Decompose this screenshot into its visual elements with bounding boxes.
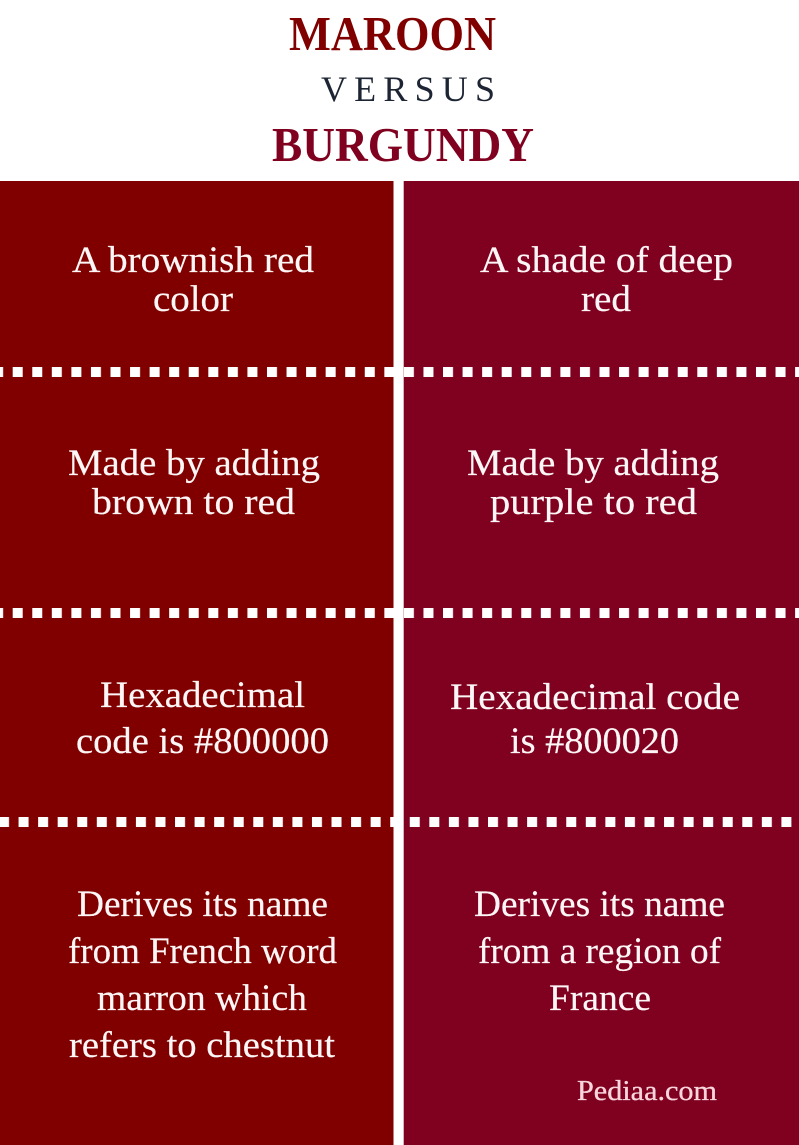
heading: burgundy: BURGUNDY [272, 117, 534, 172]
burgundy: name origin [474, 884, 725, 1019]
dotted divider 2 [0, 608, 799, 618]
maroon: hexadecimal code [76, 675, 329, 762]
maroon: how it is made: brown to red [92, 482, 296, 523]
maroon: name origin [68, 884, 337, 1066]
maroon: name origin: Derives its name [77, 884, 328, 925]
burgundy: description: red [581, 279, 632, 320]
maroon: description: color [153, 279, 233, 320]
burgundy: description: A shade of deep [480, 240, 733, 281]
burgundy: hexadecimal code [450, 677, 740, 762]
heading: maroon: MAROON [289, 6, 496, 61]
panel: burgundy column [404, 181, 799, 1145]
maroon: description [72, 240, 315, 320]
maroon: name origin: marron which [97, 978, 307, 1019]
burgundy: how it is made: Made by adding [467, 443, 719, 484]
title [272, 6, 534, 172]
maroon: how it is made [68, 443, 320, 523]
maroon: hexadecimal code: Hexadecimal [100, 675, 305, 716]
maroon: hexadecimal code: code is #800000 [76, 721, 329, 762]
dotted divider 3 [0, 817, 799, 827]
panel: maroon column [0, 181, 394, 1145]
maroon: name origin: refers to chestnut [69, 1025, 336, 1066]
maroon: name origin: from French word [68, 931, 337, 972]
burgundy: how it is made [467, 443, 719, 523]
heading: versus: VERSUS [321, 69, 495, 109]
burgundy: name origin: France [549, 978, 651, 1019]
maroon: how it is made: Made by adding [68, 443, 320, 484]
burgundy: hexadecimal code: is #800020 [510, 721, 679, 762]
burgundy: name origin: from a region of [478, 931, 722, 972]
burgundy: description [480, 240, 733, 320]
burgundy: name origin: Derives its name [474, 884, 725, 925]
dotted divider 1 [0, 367, 799, 377]
burgundy: how it is made: purple to red [490, 482, 698, 523]
watermark: Pediaa.com: Pediaa.com [577, 1076, 717, 1107]
maroon: description: A brownish red [72, 240, 315, 281]
burgundy: hexadecimal code: Hexadecimal code [450, 677, 740, 718]
